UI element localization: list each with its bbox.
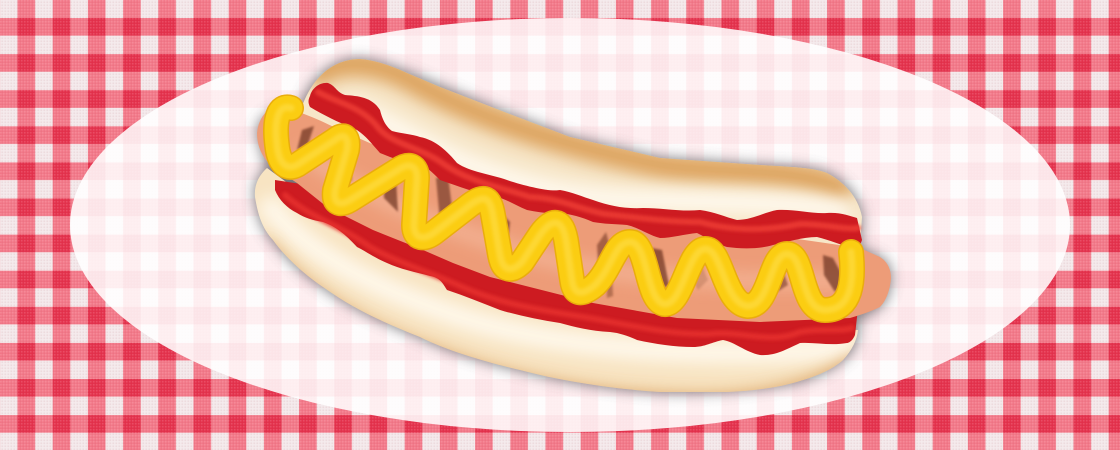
hot dog illustration [250,50,891,402]
sausage highlight [300,150,850,281]
top bun toasted crust [310,64,850,195]
top ketchup highlights [318,92,858,229]
mustard body [276,107,852,310]
mustard zigzag [276,107,852,310]
bottom bun toasted edge [262,245,858,402]
grill marks [297,126,845,298]
top ketchup [308,83,862,248]
top bun pale crumb [345,105,850,210]
bottom ketchup highlights [285,195,852,337]
bottom bun [250,160,870,402]
mustard edge [276,107,852,310]
drop shadow [255,59,891,392]
top bun [302,59,862,246]
bottom bun pale crumb [265,200,855,353]
sausage [257,107,891,322]
mustard highlight [276,107,852,310]
bottom ketchup [275,180,858,355]
